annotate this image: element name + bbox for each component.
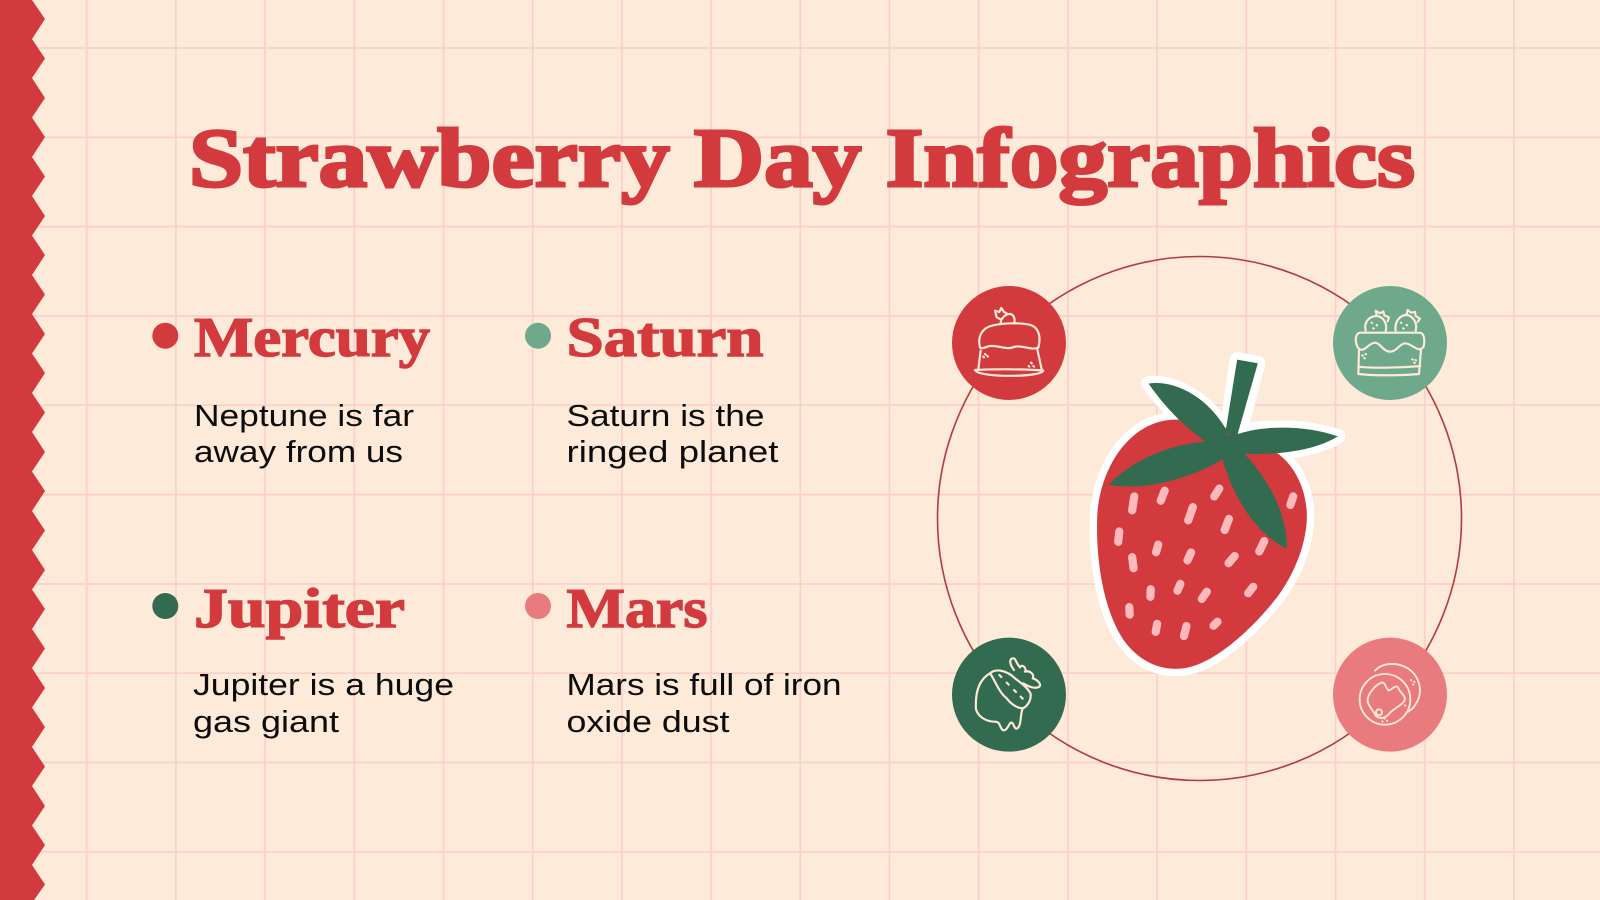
heading: Saturn: Saturn [566,307,764,369]
icon: strawberry layer cake [1333,286,1447,400]
strawberry sticker outline [1097,360,1338,669]
text: Mercury description: Neptune is far [194,398,414,433]
bullet: Jupiter [152,593,178,619]
text: Saturn description: ringed planet [566,434,779,469]
item: Jupiter [152,578,454,739]
text: Mars description: Mars is full of iron [566,667,842,702]
bullet: Mercury [152,323,178,349]
title: Strawberry Day Infographics [189,112,1415,205]
ring connecting icons [938,256,1462,780]
heading: Jupiter: Jupiter [194,578,405,640]
bullet: Mars [525,593,551,619]
text: Saturn description: Saturn is the [566,398,764,433]
bullet: Saturn [525,323,551,349]
zigzag edge band [0,0,45,900]
icon: chocolate-dipped strawberry [952,638,1066,752]
icon: strawberry pudding cake [952,286,1066,400]
strawberry stem and leaves [1109,360,1338,549]
strawberry illustration [1097,360,1338,669]
text: Jupiter description: Jupiter is a huge [193,667,454,702]
strawberry seeds [1118,489,1293,636]
item: Mars [525,578,842,739]
item: Saturn [525,307,779,469]
text: Mars description: oxide dust [566,704,730,739]
heading: Mercury: Mercury [194,307,430,369]
heading: Mars: Mars [566,578,708,640]
text: Jupiter description: gas giant [193,704,339,739]
item: Mercury [152,307,430,469]
icon: strawberry jam cookie [1333,638,1447,752]
strawberry body [1097,419,1307,669]
text: Mercury description: away from us [194,434,403,469]
